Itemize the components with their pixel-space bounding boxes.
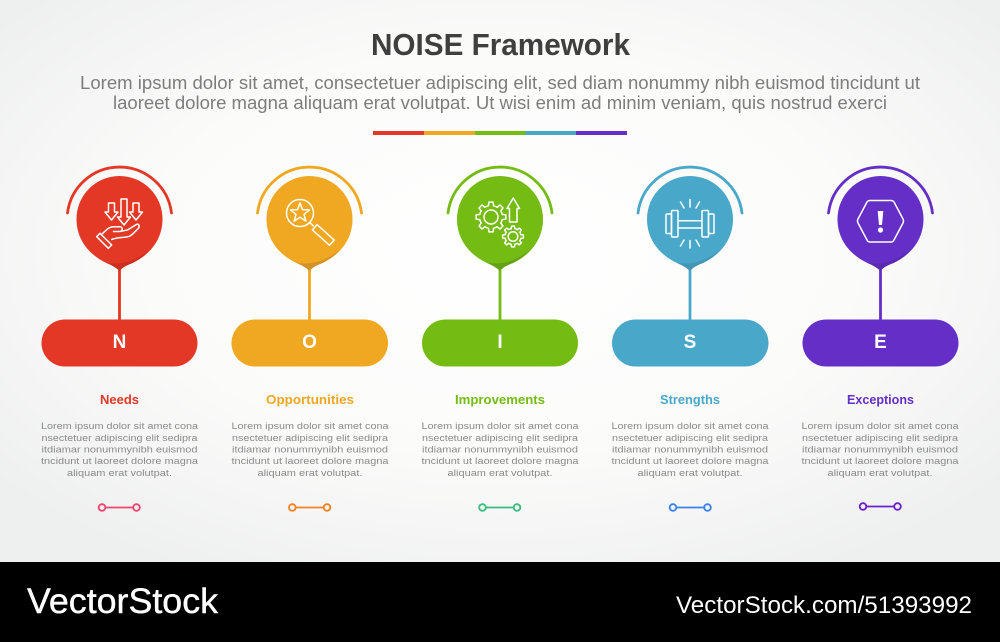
- title: NOISE Framework: [371, 27, 631, 62]
- icon: dumbbell: [666, 200, 714, 248]
- pill: I: [422, 320, 578, 366]
- text block: Improvements: [422, 421, 579, 479]
- text block: Exceptions: tncidunt ut laoreet dolore magna: [802, 456, 959, 467]
- text block: Improvements: Lorem ipsum dolor sit amet cona: [422, 421, 579, 432]
- text block: Strengths: tncidunt ut laoreet dolore magna: [612, 456, 769, 467]
- text block: Exceptions: Lorem ipsum dolor sit amet cona: [802, 421, 959, 432]
- connector: Needs: [99, 504, 140, 511]
- text block: Needs: tncidunt ut laoreet dolore magna: [41, 456, 199, 467]
- pill: E: [802, 320, 958, 366]
- label: Exceptions: Exceptions: [847, 392, 914, 407]
- connector: Strengths: [670, 504, 711, 511]
- pill: N: [42, 320, 198, 366]
- text block: Needs: nsectetuer adipiscing elit sedipra: [42, 433, 198, 444]
- pill: N: N: [113, 332, 126, 353]
- text block: Opportunities: [232, 421, 389, 479]
- column: Strengths: [612, 167, 769, 511]
- subtitle: Lorem ipsum dolor sit amet, consectetuer adipiscing elit, sed diam nonummy nibh euismod tincidunt ut: [80, 73, 920, 93]
- text block: Exceptions: aliquam erat volutpat.: [828, 468, 932, 479]
- text block: Exceptions: nsectetuer adipiscing elit sedipra: [802, 433, 959, 444]
- pill: E: E: [874, 332, 887, 353]
- text block: Opportunities: aliquam erat volutpat.: [258, 468, 362, 479]
- column: Exceptions: [802, 167, 959, 510]
- icon: warning hexagon: [858, 200, 904, 242]
- pin: Improvements: [448, 167, 552, 321]
- text block: Opportunities: tncidunt ut laoreet dolore magna: [232, 456, 389, 467]
- pin: Exceptions: [828, 167, 932, 321]
- text block: Needs: Lorem ipsum dolor sit amet cona: [41, 421, 199, 432]
- pill: I: I: [497, 332, 503, 353]
- text block: Improvements: tncidunt ut laoreet dolore magna: [422, 456, 579, 467]
- title divider: five colour bar: [373, 131, 627, 135]
- label: Needs: Needs: [100, 392, 139, 407]
- icon: magnifier with star: [286, 200, 334, 245]
- pin: Strengths: [638, 167, 742, 321]
- text block: Exceptions: itdiamar nonummynibh euismod: [802, 444, 958, 456]
- icon: arrows into hand: [97, 199, 142, 248]
- column: Improvements: [422, 167, 579, 511]
- text block: Needs: [41, 421, 199, 479]
- text block: Strengths: [612, 421, 769, 479]
- column: Needs: [41, 167, 199, 511]
- footer logo: VectorStock: [27, 582, 219, 621]
- text block: Improvements: nsectetuer adipiscing elit sedipra: [422, 433, 579, 444]
- text block: Improvements: itdiamar nonummynibh euismod: [422, 444, 578, 456]
- connector: Improvements: [479, 504, 520, 511]
- icon: gears and up arrow: [476, 198, 523, 247]
- pin: Needs: [68, 167, 172, 321]
- pill: O: [232, 320, 388, 366]
- column: Opportunities: [232, 167, 389, 511]
- subtitle: [80, 73, 920, 113]
- text block: Opportunities: itdiamar nonummynibh euismod: [232, 444, 388, 456]
- pill: S: [612, 320, 768, 366]
- text block: Needs: itdiamar nonummynibh euismod: [42, 444, 198, 456]
- text block: Exceptions: [802, 421, 959, 479]
- label: Improvements: Improvements: [455, 392, 545, 407]
- text block: Strengths: nsectetuer adipiscing elit sedipra: [612, 433, 769, 444]
- pill: S: S: [684, 332, 696, 353]
- text block: Opportunities: nsectetuer adipiscing elit sedipra: [232, 433, 389, 444]
- connector: Opportunities: [289, 504, 330, 511]
- subtitle: laoreet dolore magna aliquam erat volutpat. Ut wisi enim ad minim veniam, quis nostrud exerci: [113, 93, 887, 113]
- text block: Needs: aliquam erat volutpat.: [67, 468, 172, 479]
- text block: Strengths: Lorem ipsum dolor sit amet cona: [612, 421, 769, 432]
- footer bar: [0, 562, 1000, 642]
- text block: Strengths: aliquam erat volutpat.: [638, 468, 742, 479]
- pin: Opportunities: [258, 167, 362, 321]
- text block: Strengths: itdiamar nonummynibh euismod: [612, 444, 768, 456]
- pill: O: O: [302, 332, 317, 353]
- text block: Opportunities: Lorem ipsum dolor sit amet cona: [232, 421, 389, 432]
- connector: Exceptions: [860, 503, 901, 510]
- label: Opportunities: Opportunities: [266, 392, 354, 407]
- label: Strengths: Strengths: [660, 392, 720, 407]
- footer image id: VectorStock.com/51393992: [676, 592, 972, 619]
- text block: Improvements: aliquam erat volutpat.: [448, 468, 552, 479]
